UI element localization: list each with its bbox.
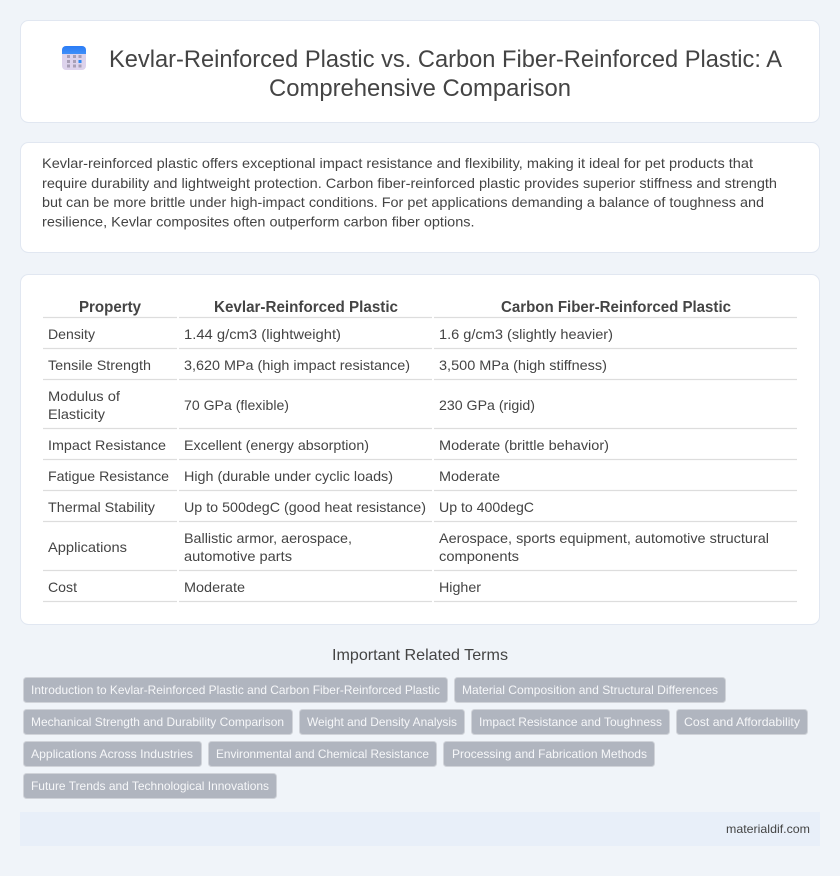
text block: introduction paragraph <box>42 155 777 230</box>
table row: fatigue resistance <box>48 468 500 484</box>
heading: important related terms: Important Related Terms <box>332 647 508 664</box>
tag: future trends: Future Trends and Technological Innovations <box>31 779 269 793</box>
table row: cost: Cost <box>48 579 77 595</box>
footer source text: materialdif.com <box>726 822 810 836</box>
panel: related term tags <box>24 678 808 798</box>
table row: fatigue resistance: Moderate <box>439 468 500 484</box>
table row: applications: Ballistic armor, aerospace, <box>184 530 352 546</box>
panel: introduction <box>20 142 820 252</box>
tag: mechanical strength <box>24 710 292 734</box>
tag: introduction <box>24 678 448 702</box>
tag: mechanical strength: Mechanical Strength and Durability Comparison <box>31 715 284 729</box>
tag: introduction: Introduction to Kevlar-Reinforced Plastic and Carbon Fiber-Reinforced Plastic <box>31 683 440 697</box>
text block: introduction paragraph: require durability and lightweight protection. Carbon fiber-reinforced plastic provides superior stiffness and strength <box>42 175 777 191</box>
icon: calendar <box>62 46 86 70</box>
table header row <box>79 299 731 316</box>
table header row: Property <box>79 299 141 316</box>
table row: applications: Applications <box>48 539 127 555</box>
table row: cost: Moderate <box>184 579 245 595</box>
tag: weight and density <box>300 710 464 734</box>
table row: applications: Aerospace, sports equipment, automotive structural <box>439 530 769 546</box>
panel: title header <box>20 20 820 122</box>
tag: cost and affordability: Cost and Affordability <box>684 715 800 729</box>
table row: thermal stability: Up to 400degC <box>439 499 534 515</box>
table row: modulus of elasticity: Elasticity <box>48 406 105 422</box>
table row: tensile strength: Tensile Strength <box>48 357 151 373</box>
table row: applications: automotive parts <box>184 548 292 564</box>
tag: future trends <box>24 774 276 798</box>
table row: fatigue resistance: High (durable under cyclic loads) <box>184 468 393 484</box>
table row: thermal stability <box>48 499 534 515</box>
tag: material composition <box>454 678 726 702</box>
tag: cost and affordability <box>676 710 808 734</box>
table row: impact resistance <box>48 437 609 453</box>
table header row: Kevlar-Reinforced Plastic <box>214 299 398 316</box>
tag: impact resistance: Impact Resistance and Toughness <box>479 715 662 729</box>
table row: impact resistance: Excellent (energy absorption) <box>184 437 369 453</box>
tag: processing methods <box>444 742 654 766</box>
table row: density <box>48 326 613 342</box>
table row: tensile strength: 3,620 MPa (high impact resistance) <box>184 357 410 373</box>
title: Kevlar-Reinforced Plastic vs. Carbon Fiber-Reinforced Plastic: A <box>109 46 782 73</box>
table row: density: 1.44 g/cm3 (lightweight) <box>184 326 341 342</box>
text block: introduction paragraph: resilience, Kevlar composites often outperform carbon fiber options. <box>42 214 474 230</box>
table row: applications: components <box>439 548 519 564</box>
text block: introduction paragraph: but can be more brittle under high-impact conditions. For pet applications demanding a balance of toughness and <box>42 194 764 210</box>
table row: thermal stability: Thermal Stability <box>48 499 155 515</box>
table row: tensile strength: 3,500 MPa (high stiffness) <box>439 357 607 373</box>
tag: applications <box>24 742 202 766</box>
table row: fatigue resistance: Fatigue Resistance <box>48 468 169 484</box>
table row: cost <box>48 579 481 595</box>
tag: environmental resistance: Environmental and Chemical Resistance <box>216 747 429 761</box>
table row: impact resistance: Moderate (brittle behavior) <box>439 437 609 453</box>
tag: applications: Applications Across Industries <box>31 747 193 761</box>
tag: weight and density: Weight and Density Analysis <box>307 715 457 729</box>
table row: thermal stability: Up to 500degC (good heat resistance) <box>184 499 426 515</box>
tag: material composition: Material Composition and Structural Differences <box>462 683 718 697</box>
table row: tensile strength <box>48 357 607 373</box>
table row: modulus of elasticity <box>48 388 535 422</box>
panel: comparison table <box>20 274 820 624</box>
table row: density: 1.6 g/cm3 (slightly heavier) <box>439 326 613 342</box>
tag: impact resistance <box>472 710 670 734</box>
table row: modulus of elasticity: Modulus of <box>48 388 120 404</box>
title <box>109 46 782 102</box>
table header row: Carbon Fiber-Reinforced Plastic <box>501 299 731 316</box>
table row: applications <box>48 530 769 564</box>
text block: introduction paragraph: Kevlar-reinforced plastic offers exceptional impact resistance and flexibility, making it ideal for pet products that <box>42 155 753 171</box>
footer band <box>20 812 820 846</box>
table row: modulus of elasticity: 230 GPa (rigid) <box>439 397 535 413</box>
table row: density: Density <box>48 326 95 342</box>
title: Comprehensive Comparison <box>269 75 571 102</box>
table row: modulus of elasticity: 70 GPa (flexible) <box>184 397 289 413</box>
table row: cost: Higher <box>439 579 481 595</box>
table row: impact resistance: Impact Resistance <box>48 437 166 453</box>
tag: processing methods: Processing and Fabrication Methods <box>452 747 647 761</box>
tag: environmental resistance <box>208 742 436 766</box>
